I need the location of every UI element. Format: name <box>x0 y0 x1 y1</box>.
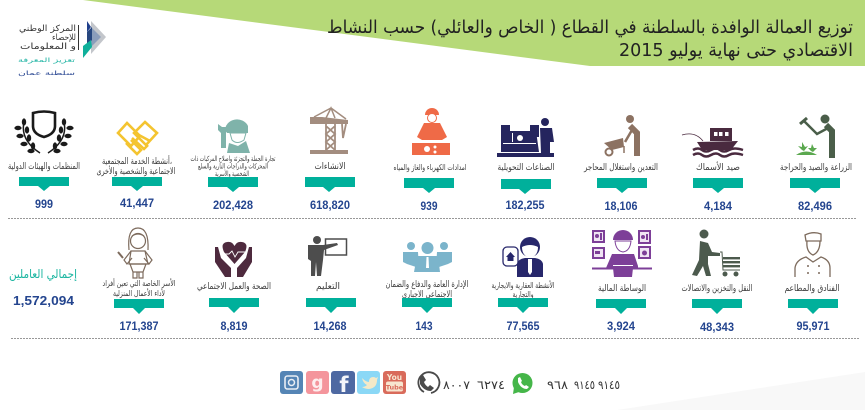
label <box>96 155 176 177</box>
panel: electricity <box>394 108 466 213</box>
icon: instagram <box>280 371 303 394</box>
panel: wholesale and repair <box>190 119 276 212</box>
label: امدادات الكهرباء والغاز والمياه <box>394 163 466 172</box>
icon: housemaid <box>118 228 152 278</box>
icon: engineer with screens <box>592 230 652 277</box>
title: الاقتصادي حتى نهاية يوليو 2015 <box>619 40 853 61</box>
icon: heart in hands <box>215 242 252 277</box>
value: 48,343 <box>700 320 734 334</box>
value: 18,106 <box>604 199 638 213</box>
value: 8,819 <box>220 319 248 333</box>
label: الشخصية والأسرية <box>215 169 249 178</box>
icon: chef <box>795 233 830 277</box>
icon: google plus: g <box>311 373 324 393</box>
marker bar <box>596 299 646 314</box>
panel: domestic workers <box>102 228 176 333</box>
panel: social services <box>96 122 176 210</box>
value: 14,268 <box>314 319 347 333</box>
whatsapp number: ٩٦٨ <box>547 378 569 392</box>
whatsapp number <box>547 378 620 392</box>
icon: worker with cart <box>692 230 740 276</box>
value: 939 <box>420 199 438 213</box>
icon: factory worker <box>497 118 554 157</box>
icon: facebook: f <box>339 373 349 397</box>
marker bar <box>306 298 356 313</box>
label: النقل والتخزين والاتصالات <box>682 284 752 294</box>
icon: youtube: You <box>386 373 402 382</box>
label: المنظمات والهيئات الدولية <box>8 162 80 172</box>
total label: إجمالي العاملين <box>9 267 77 282</box>
icon: youtube: Tube <box>386 384 404 392</box>
panel: international organizations <box>8 112 80 211</box>
label: الاجتماعي الاجباري <box>402 290 452 300</box>
logo: سلطنة عمان <box>18 70 75 77</box>
value: 143 <box>416 319 433 333</box>
total value: 1,572,094 <box>13 293 75 308</box>
value: 171,387 <box>120 319 159 333</box>
title <box>327 17 853 61</box>
icon: teacher at board <box>308 236 346 276</box>
whatsapp number: ٩١٤٥ <box>574 378 595 392</box>
label: المحركات والدراجات النارية والسلع <box>198 162 268 170</box>
icon: handshake <box>118 122 157 154</box>
value: 618,820 <box>310 198 350 212</box>
panel: public administration <box>386 242 468 333</box>
panel: manufacturing <box>497 118 554 212</box>
icon: crane <box>310 108 348 154</box>
panel: transport and storage <box>682 230 752 334</box>
label: أنشطة الخدمة المجتمعية، <box>102 155 172 167</box>
marker bar <box>498 298 548 313</box>
label <box>386 280 468 300</box>
panel: fishing <box>682 128 743 213</box>
label: والتجارية <box>512 290 534 299</box>
label: الأسر الخاصة التي تعين أفراد <box>102 278 176 288</box>
label: صيد الأسماك <box>696 161 740 173</box>
icon: whatsapp <box>512 373 532 394</box>
label: الفنادق والمطاعم <box>784 284 840 294</box>
icon: shield and laurels <box>14 112 74 153</box>
icon: engineer with gears <box>412 108 450 155</box>
logo: و المعلومات <box>20 42 76 52</box>
value: 41,447 <box>120 196 154 210</box>
icon: twitter <box>357 371 380 394</box>
icon: agent with house bubble <box>503 237 543 277</box>
panel: health <box>197 242 271 333</box>
whatsapp number: ٩١٤٥ <box>598 378 620 392</box>
label: الصحة والعمل الاجتماعي <box>197 282 271 292</box>
marker bar <box>790 178 840 193</box>
value: 182,255 <box>506 198 545 212</box>
value: 82,496 <box>798 199 832 213</box>
logo <box>18 21 106 77</box>
phone number: ٦٢٧٤ <box>477 378 505 392</box>
label <box>492 280 554 299</box>
marker bar <box>788 299 838 314</box>
marker bar <box>305 177 355 192</box>
label <box>102 278 176 298</box>
label: الاجتماعية والشخصية والأخرى <box>96 165 176 177</box>
value: 95,971 <box>796 319 830 333</box>
label <box>190 155 276 178</box>
label: تجارة الجملة والتجزئة واصلاح المركبات ذات <box>190 155 276 163</box>
label: الانشاءات <box>314 162 346 172</box>
icon: wheelbarrow worker <box>604 115 637 156</box>
panel: education <box>306 236 356 333</box>
value: 3,924 <box>607 319 635 333</box>
value: 77,565 <box>506 319 540 333</box>
icon: three people <box>403 242 452 272</box>
marker bar <box>404 178 454 193</box>
marker bar <box>597 178 647 193</box>
label: لأداء الأعمال المنزلية <box>113 288 165 298</box>
phone number <box>443 378 505 392</box>
panel: mining <box>583 115 658 213</box>
marker bar <box>402 298 452 313</box>
marker bar <box>19 177 69 191</box>
icon: youtube <box>383 371 406 394</box>
marker bar <box>501 179 551 194</box>
icon: boat <box>682 128 743 156</box>
label: التعدين واستغلال المحاجر <box>583 163 658 173</box>
panel: construction <box>305 108 355 212</box>
icon: facebook <box>331 371 355 397</box>
logo: المركز الوطني <box>19 24 76 34</box>
label: التعليم <box>316 282 340 292</box>
logo: تعزيز المعرفة <box>18 57 76 64</box>
marker bar <box>112 177 162 191</box>
panel: financial intermediation <box>592 230 652 333</box>
label: الأنشطة العقارية والايجارية <box>492 280 554 290</box>
label: الصناعات التحويلية <box>498 163 554 173</box>
panel: agriculture <box>780 114 852 213</box>
label: الوساطة المالية <box>598 284 646 294</box>
icon: google plus <box>306 371 329 394</box>
icon: farmer <box>796 114 832 158</box>
marker bar <box>692 299 742 314</box>
header banner <box>83 0 865 66</box>
marker bar <box>693 178 743 193</box>
panel: total workers <box>9 267 77 308</box>
value: 999 <box>35 197 53 211</box>
marker bar <box>208 177 258 192</box>
panel: real estate <box>492 237 554 333</box>
footer: contacts <box>280 371 620 397</box>
value: 4,184 <box>704 199 732 213</box>
marker bar <box>114 299 164 314</box>
icon: phone <box>418 372 439 393</box>
value: 202,428 <box>213 198 253 212</box>
panel: hotels and restaurants <box>784 233 840 333</box>
marker bar <box>209 298 259 313</box>
phone number: ٨٠٠٧ <box>443 378 471 392</box>
icon: mechanic with wrench <box>218 119 250 153</box>
label: الإدارة العامة والدفاع والضمان <box>386 280 468 290</box>
logo: للإحصاء <box>52 33 76 43</box>
